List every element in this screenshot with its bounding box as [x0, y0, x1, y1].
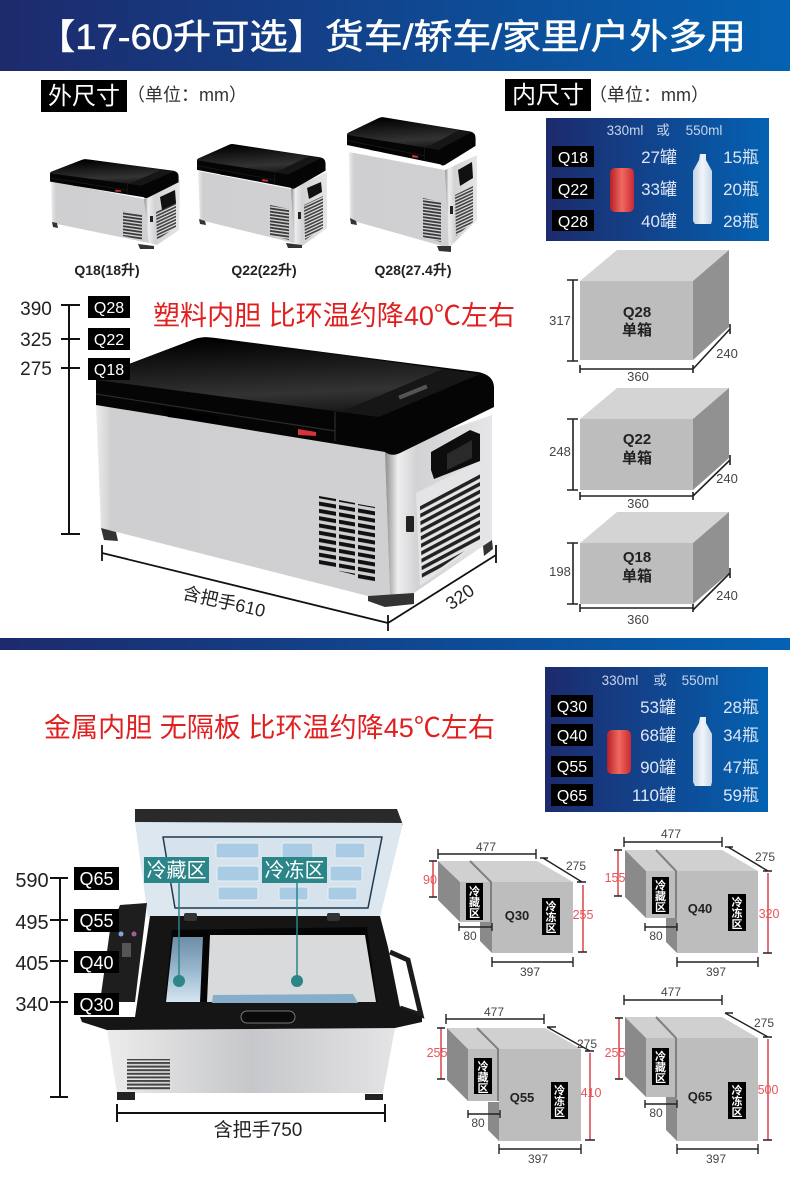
capacity panel: plastic models: Q22 — [558, 182, 588, 199]
cube: Q28: 360 — [627, 369, 649, 384]
capacity panel: metal models: 550ml — [682, 673, 718, 688]
cabinet diagram: Q40: 80 — [649, 929, 663, 943]
callout: fridge zone — [144, 857, 209, 987]
cabinet diagram: Q40: 320 — [759, 907, 779, 921]
callout: fridge zone: 冷藏区 — [146, 859, 206, 882]
capacity panel: metal models: 90罐 — [640, 758, 676, 777]
cabinet diagram: Q30: 80 — [463, 929, 477, 943]
header banner — [0, 0, 790, 71]
capacity panel: plastic models: 15瓶 — [723, 148, 759, 167]
silver body — [107, 1028, 395, 1093]
cabinet diagram: Q40: 区 — [732, 918, 742, 931]
capacity panel: plastic models: 28瓶 — [723, 212, 759, 231]
height scale: plastic models: Q22 — [94, 332, 124, 349]
capacity panel: metal models: Q55 — [557, 759, 587, 776]
height scale: metal models: 340 — [15, 994, 49, 1016]
front handle — [241, 1011, 295, 1023]
product captions: Q28(27.4升) — [374, 262, 452, 278]
cabinet diagram: Q40: 397 — [706, 965, 726, 979]
cabinet diagram: Q65: 255 — [605, 1046, 625, 1060]
cabinet diagram: Q55 — [427, 1005, 601, 1166]
cube: Q22: 360 — [627, 496, 649, 511]
cabinet diagram: Q30: 藏 — [469, 895, 480, 909]
capacity panel: metal models: Q65 — [557, 788, 587, 805]
label: inner size: （单位：mm） — [589, 85, 709, 105]
cabinet diagram: Q65: Q65 — [688, 1089, 712, 1104]
cabinet diagram: Q30: 275 — [566, 859, 586, 873]
black rim — [80, 916, 422, 1030]
capacity panel: metal models: 28瓶 — [723, 698, 759, 717]
capacity panel: metal models — [545, 667, 768, 812]
label: inner size: 内尺寸 — [512, 82, 584, 109]
hinges — [184, 913, 197, 921]
capacity panel: metal models: 68罐 — [640, 726, 676, 745]
cabinet diagram: Q55: 冷 — [478, 1059, 488, 1073]
callout: freezer zone: 冷冻区 — [264, 859, 324, 882]
cube: Q28: Q28 — [623, 304, 651, 321]
product: Q28 fridge — [347, 117, 477, 252]
capacity panel: plastic models: 40罐 — [641, 212, 677, 231]
cabinet diagram: Q65: 藏 — [655, 1060, 666, 1074]
height scale: metal models: 405 — [15, 953, 49, 975]
cube: Q28 — [549, 250, 738, 384]
capacity panel: plastic models: 33罐 — [641, 180, 677, 199]
cabinet diagram: Q30: 397 — [520, 965, 540, 979]
cube: Q28: 317 — [549, 313, 571, 328]
cabinet diagram: Q55: Q55 — [510, 1090, 534, 1105]
cabinet diagram: Q55: 410 — [581, 1086, 601, 1100]
cube: Q18: 198 — [549, 564, 571, 579]
capacity panel: plastic models: Q28 — [558, 214, 588, 231]
label: outer size: （单位：mm） — [127, 85, 247, 105]
side handle — [390, 952, 421, 1015]
height scale: plastic models: 325 — [20, 330, 52, 351]
height scale: plastic models: 390 — [20, 299, 52, 320]
product captions: Q18(18升) — [74, 262, 140, 278]
capacity panel: plastic models — [546, 118, 769, 241]
capacity panel: metal models: 或 — [653, 673, 667, 688]
cube: Q22: 248 — [549, 444, 571, 459]
cabinet diagram: Q55: 区 — [478, 1082, 488, 1095]
cabinet diagram: Q40: 477 — [661, 827, 681, 841]
height scale: plastic models: Q28 — [94, 300, 124, 317]
cabinet diagram: Q30: 冷 — [546, 899, 556, 913]
cabinet diagram: Q40 — [605, 827, 779, 979]
open lid — [135, 809, 403, 917]
capacity panel: metal models: 110罐 — [632, 786, 676, 805]
cube: Q28: 240 — [716, 346, 738, 361]
capacity panel: plastic models: 330ml — [607, 123, 643, 138]
cube: Q18: 单箱 — [622, 567, 652, 585]
heading: plastic liner: 塑料内胆 比环温约降40℃左右 — [153, 301, 515, 331]
cabinet diagram: Q55: 冻 — [554, 1094, 565, 1108]
cabinet diagram: Q65: 冻 — [732, 1094, 742, 1108]
cabinet diagram: Q65 — [605, 985, 778, 1166]
cabinet diagram: Q65: 275 — [754, 1016, 774, 1030]
product: Q22 fridge — [197, 144, 327, 248]
capacity panel: metal models: Q40 — [557, 728, 587, 745]
control panel — [100, 903, 147, 1002]
cabinet diagram: Q40: Q40 — [688, 901, 712, 916]
cabinet diagram: Q55: 477 — [484, 1005, 504, 1019]
cabinet diagram: Q40: 冷 — [655, 878, 666, 892]
cabinet diagram: Q40: 155 — [605, 871, 625, 885]
height scale: metal models: 495 — [15, 912, 49, 934]
cabinet diagram: Q30 — [423, 840, 593, 979]
product captions — [74, 262, 452, 278]
icon: bottle — [693, 717, 712, 786]
cabinet diagram: Q30: 255 — [573, 908, 593, 922]
height scale: metal models: Q55 — [79, 911, 114, 931]
capacity panel: metal models: Q30 — [557, 699, 587, 716]
title — [37, 18, 746, 57]
cabinet diagram: Q65: 477 — [661, 985, 681, 999]
dimension lines: 610 and 320 — [102, 545, 496, 631]
dimension lines: 610 and 320: 320 — [442, 580, 478, 614]
cabinet diagram: Q55: 255 — [427, 1046, 447, 1060]
cabinet diagram: Q55: 冷 — [554, 1083, 565, 1097]
title: 货车/轿车/家里/户外多用 — [325, 18, 746, 57]
cabinet diagram: Q55: 80 — [471, 1116, 485, 1130]
fridge compartment — [166, 937, 203, 1002]
cube: Q22: Q22 — [623, 431, 651, 448]
callout: freezer zone — [262, 857, 327, 987]
freezer compartment — [207, 935, 376, 1002]
height scale: plastic models: 275 — [20, 359, 52, 380]
cube: Q22: 单箱 — [622, 449, 652, 467]
cube: Q22 — [549, 388, 738, 511]
heading: metal liner: 金属内胆 无隔板 比环温约降45℃左右 — [44, 713, 495, 743]
cabinet diagram: Q40: 冻 — [732, 906, 742, 920]
dimension lines: 610 and 320: 含把手610 — [181, 583, 267, 621]
cabinet diagram: Q30: 冷 — [469, 884, 480, 898]
cabinet diagram: Q65: 区 — [732, 1106, 742, 1119]
cabinet diagram: Q30: Q30 — [505, 908, 529, 923]
cabinet diagram: Q65: 冷 — [655, 1049, 666, 1063]
title: 【17-60升可选】 — [37, 18, 326, 57]
width dimension: 750: 含把手750 — [214, 1119, 302, 1141]
cabinet diagram: Q55: 区 — [554, 1106, 565, 1119]
cabinet diagram: Q30: 区 — [469, 907, 480, 920]
cabinet diagram: Q30: 90 — [423, 873, 437, 887]
cabinet diagram: Q55: 藏 — [478, 1070, 488, 1084]
icon: bottle — [693, 154, 712, 224]
label: outer size — [41, 80, 247, 112]
width dimension: 750 — [117, 1104, 385, 1141]
capacity panel: plastic models: 20瓶 — [723, 180, 759, 199]
cabinet diagram: Q40: 275 — [755, 850, 775, 864]
capacity panel: plastic models: 或 — [656, 123, 670, 138]
cabinet diagram: Q40: 藏 — [655, 889, 666, 903]
capacity panel: metal models: 34瓶 — [723, 726, 759, 745]
icon: can — [607, 730, 631, 774]
cabinet diagram: Q55: 397 — [528, 1152, 548, 1166]
height scale: plastic models: Q18 — [94, 362, 124, 379]
cube: Q18 — [549, 512, 738, 627]
product: Q18 fridge — [50, 159, 180, 249]
cube: Q22: 240 — [716, 471, 738, 486]
cube: Q18: Q18 — [623, 549, 651, 566]
product captions: Q22(22升) — [231, 262, 297, 278]
height scale: plastic models — [20, 296, 130, 534]
height scale: metal models: Q40 — [79, 953, 114, 973]
cabinet diagram: Q40: 冷 — [732, 895, 742, 909]
cabinet diagram: Q65: 冷 — [732, 1083, 742, 1097]
cabinet diagram: Q30: 477 — [476, 840, 496, 854]
capacity panel: plastic models: Q18 — [558, 150, 588, 167]
capacity panel: plastic models: 27罐 — [641, 148, 677, 167]
cabinet diagram: Q55: 275 — [577, 1037, 597, 1051]
cube: Q28: 单箱 — [622, 321, 652, 339]
capacity panel: metal models: 330ml — [602, 673, 638, 688]
cabinet diagram: Q40: 区 — [655, 901, 666, 914]
height scale: metal models: 590 — [15, 870, 49, 892]
cabinet diagram: Q65: 80 — [649, 1106, 663, 1120]
open fridge illustration — [80, 809, 422, 1100]
cabinet diagram: Q30: 区 — [546, 922, 556, 935]
height scale: metal models: Q30 — [79, 995, 114, 1015]
height scale: metal models: Q65 — [79, 869, 114, 889]
cube: Q18: 240 — [716, 588, 738, 603]
capacity panel: metal models: 47瓶 — [723, 758, 759, 777]
icon: can — [610, 168, 634, 212]
cabinet diagram: Q65: 397 — [706, 1152, 726, 1166]
cube: Q18: 360 — [627, 612, 649, 627]
label: inner size — [505, 79, 709, 111]
section divider band — [0, 638, 790, 650]
cabinet diagram: Q65: 区 — [655, 1072, 666, 1085]
cabinet diagram: Q65: 500 — [758, 1083, 778, 1097]
cabinet diagram: Q30: 冻 — [546, 910, 556, 924]
capacity panel: metal models: 59瓶 — [723, 786, 759, 805]
large fridge illustration — [96, 337, 494, 607]
capacity panel: plastic models: 550ml — [686, 123, 722, 138]
height scale: metal models — [15, 867, 119, 1097]
capacity panel: metal models: 53罐 — [640, 698, 676, 717]
label: outer size: 外尺寸 — [48, 83, 120, 110]
